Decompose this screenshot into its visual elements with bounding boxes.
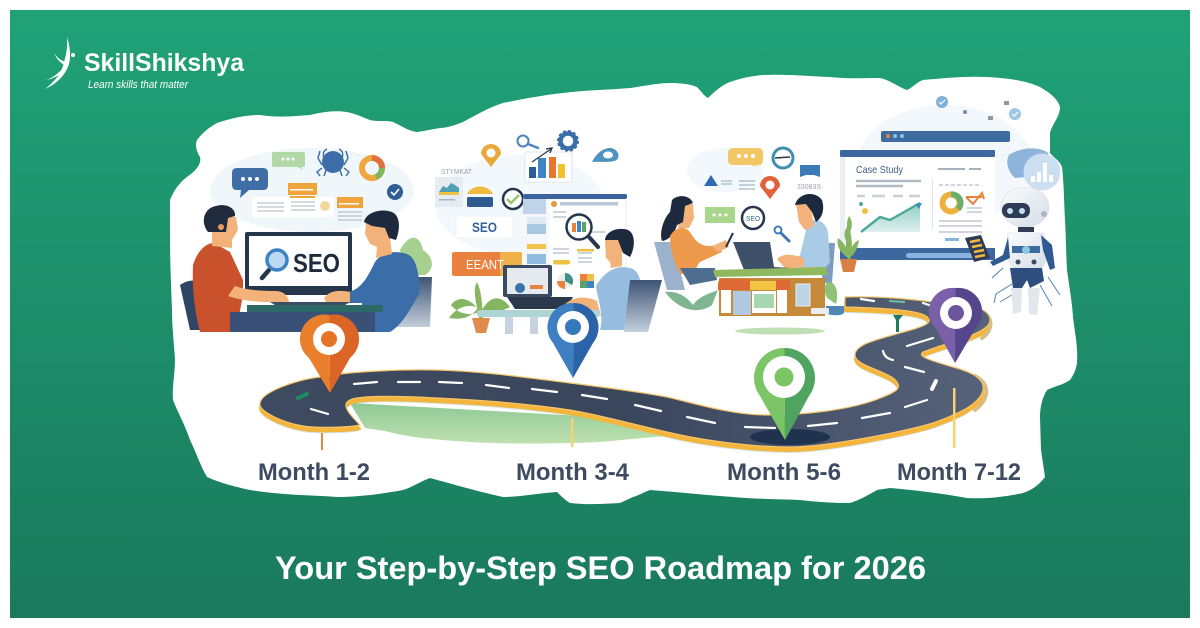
faded caption: 33083S [797,184,821,191]
robot tablet [965,235,990,262]
scene: month 3-4 content team [435,131,662,334]
store awnings [718,279,790,290]
pale cloud behind windows [857,105,1033,225]
white torn-paper panel [170,75,1077,504]
chart bubble with blob [1007,148,1060,190]
pin: month 5-6 green [754,348,815,440]
robot assistant [965,187,1060,315]
grass patch [350,403,665,444]
shadow under green pin [750,429,830,445]
title: Your Step-by-Step SEO Roadmap for 2026 [275,550,926,586]
donut chart [942,194,961,212]
icon: small magnifier [518,136,538,148]
scene: month 1-2 SEO audit team [180,148,432,332]
plant behind right man [400,238,432,275]
icon: teal bubble [592,148,618,162]
EEAT tag: EEANT [466,258,504,272]
woman in orange [654,196,733,290]
pin: month 7-12 purple [929,288,982,363]
icon: SEO ring: SEO [746,214,760,223]
dashboard window [523,194,627,302]
plant with pot [449,282,510,333]
icon: red pin [760,176,780,199]
icon: crawler spider [317,149,349,176]
man at laptop [777,194,830,272]
ground shadow [735,328,825,334]
scene: month 7-12 case study and robot [837,96,1060,315]
monitor label: SEO [293,248,340,278]
robot wires [992,268,1060,306]
label: month 7-12: Month 7-12 [897,459,1021,486]
desk [230,302,383,332]
robot body [1007,233,1047,270]
case study window [840,150,995,260]
logo [45,37,245,91]
icon: swoosh figure [45,37,75,89]
green road post [893,315,903,332]
right plant with pot [811,282,844,315]
logo wordmark: SkillShikshya [84,49,245,77]
pin: month 1-2 orange [300,314,359,393]
SEO tag: SEO [472,219,497,235]
road roadmap [260,297,990,453]
colour tiles [580,274,594,288]
left chair [180,280,213,330]
icon: teal bubble [773,148,793,168]
back browser window [881,131,1010,161]
man in red shirt [193,205,289,332]
road surface [260,297,990,447]
pale cloud behind audit icons [210,148,414,232]
icon: green bubble [705,207,735,223]
road shadow [260,303,990,453]
monitor with SEO [245,232,352,295]
label: month 3-4: Month 3-4 [516,459,630,486]
mini chart card [435,177,463,207]
robot head [1001,187,1049,227]
growth chart [859,202,922,232]
laptop [503,265,573,309]
icon: pie chart [557,273,573,289]
teal desk [477,310,600,334]
storefront desk [713,267,828,316]
road edge yellow [260,301,990,451]
laptop [733,242,790,270]
right chair [822,243,835,283]
pin: month 3-4 blue [547,303,599,378]
icon: donut chart [362,158,382,178]
milestone poles [321,388,956,450]
robot legs [1010,268,1044,288]
floating check bubbles [936,96,1021,120]
icon: small blue card [800,165,820,177]
man in blue shirt at dashboard [564,229,641,330]
icon: yellow chat bubble [728,148,763,167]
robot arms [990,235,1055,270]
icon: check badge [387,184,403,200]
scene: month 5-6 local SEO team [654,148,844,334]
SEO tag [456,216,513,238]
logo tagline: Learn skills that matter [88,79,189,91]
icon: SEO ring [742,207,764,229]
potted plant [837,216,859,272]
road dashes [298,299,936,428]
document cards [252,183,363,220]
right chair [392,277,432,327]
store windows [721,284,810,315]
man in blue shirt [324,210,420,332]
icon: yellow badge [467,186,493,207]
label: month 1-2: Month 1-2 [258,459,370,486]
icon: magnifier [262,250,287,278]
icon: chat bubble green [272,152,305,170]
icon: gear [558,131,578,151]
faded caption: STYMKAT [441,169,473,176]
icon: location pin yellow [481,144,501,167]
case study heading: Case Study [856,164,904,176]
robot chest [1012,246,1040,264]
label: month 5-6: Month 5-6 [727,459,841,486]
bar chart card [525,148,572,182]
tan road edge on far bends [975,310,990,410]
icon: chat bubble blue [232,168,268,198]
icon: check ring [503,189,523,209]
left shrub [665,290,718,310]
bottom bar [840,248,995,260]
icon: large magnifier [566,214,598,247]
pale cloud behind local icons [687,148,763,192]
icon: triangle marker [704,175,755,189]
pale cloud behind content icons [435,155,605,255]
icon: wrench magnifier [774,226,789,241]
EEAT tag [452,252,522,276]
dashboard chair [624,280,662,332]
mini badge [966,193,984,204]
